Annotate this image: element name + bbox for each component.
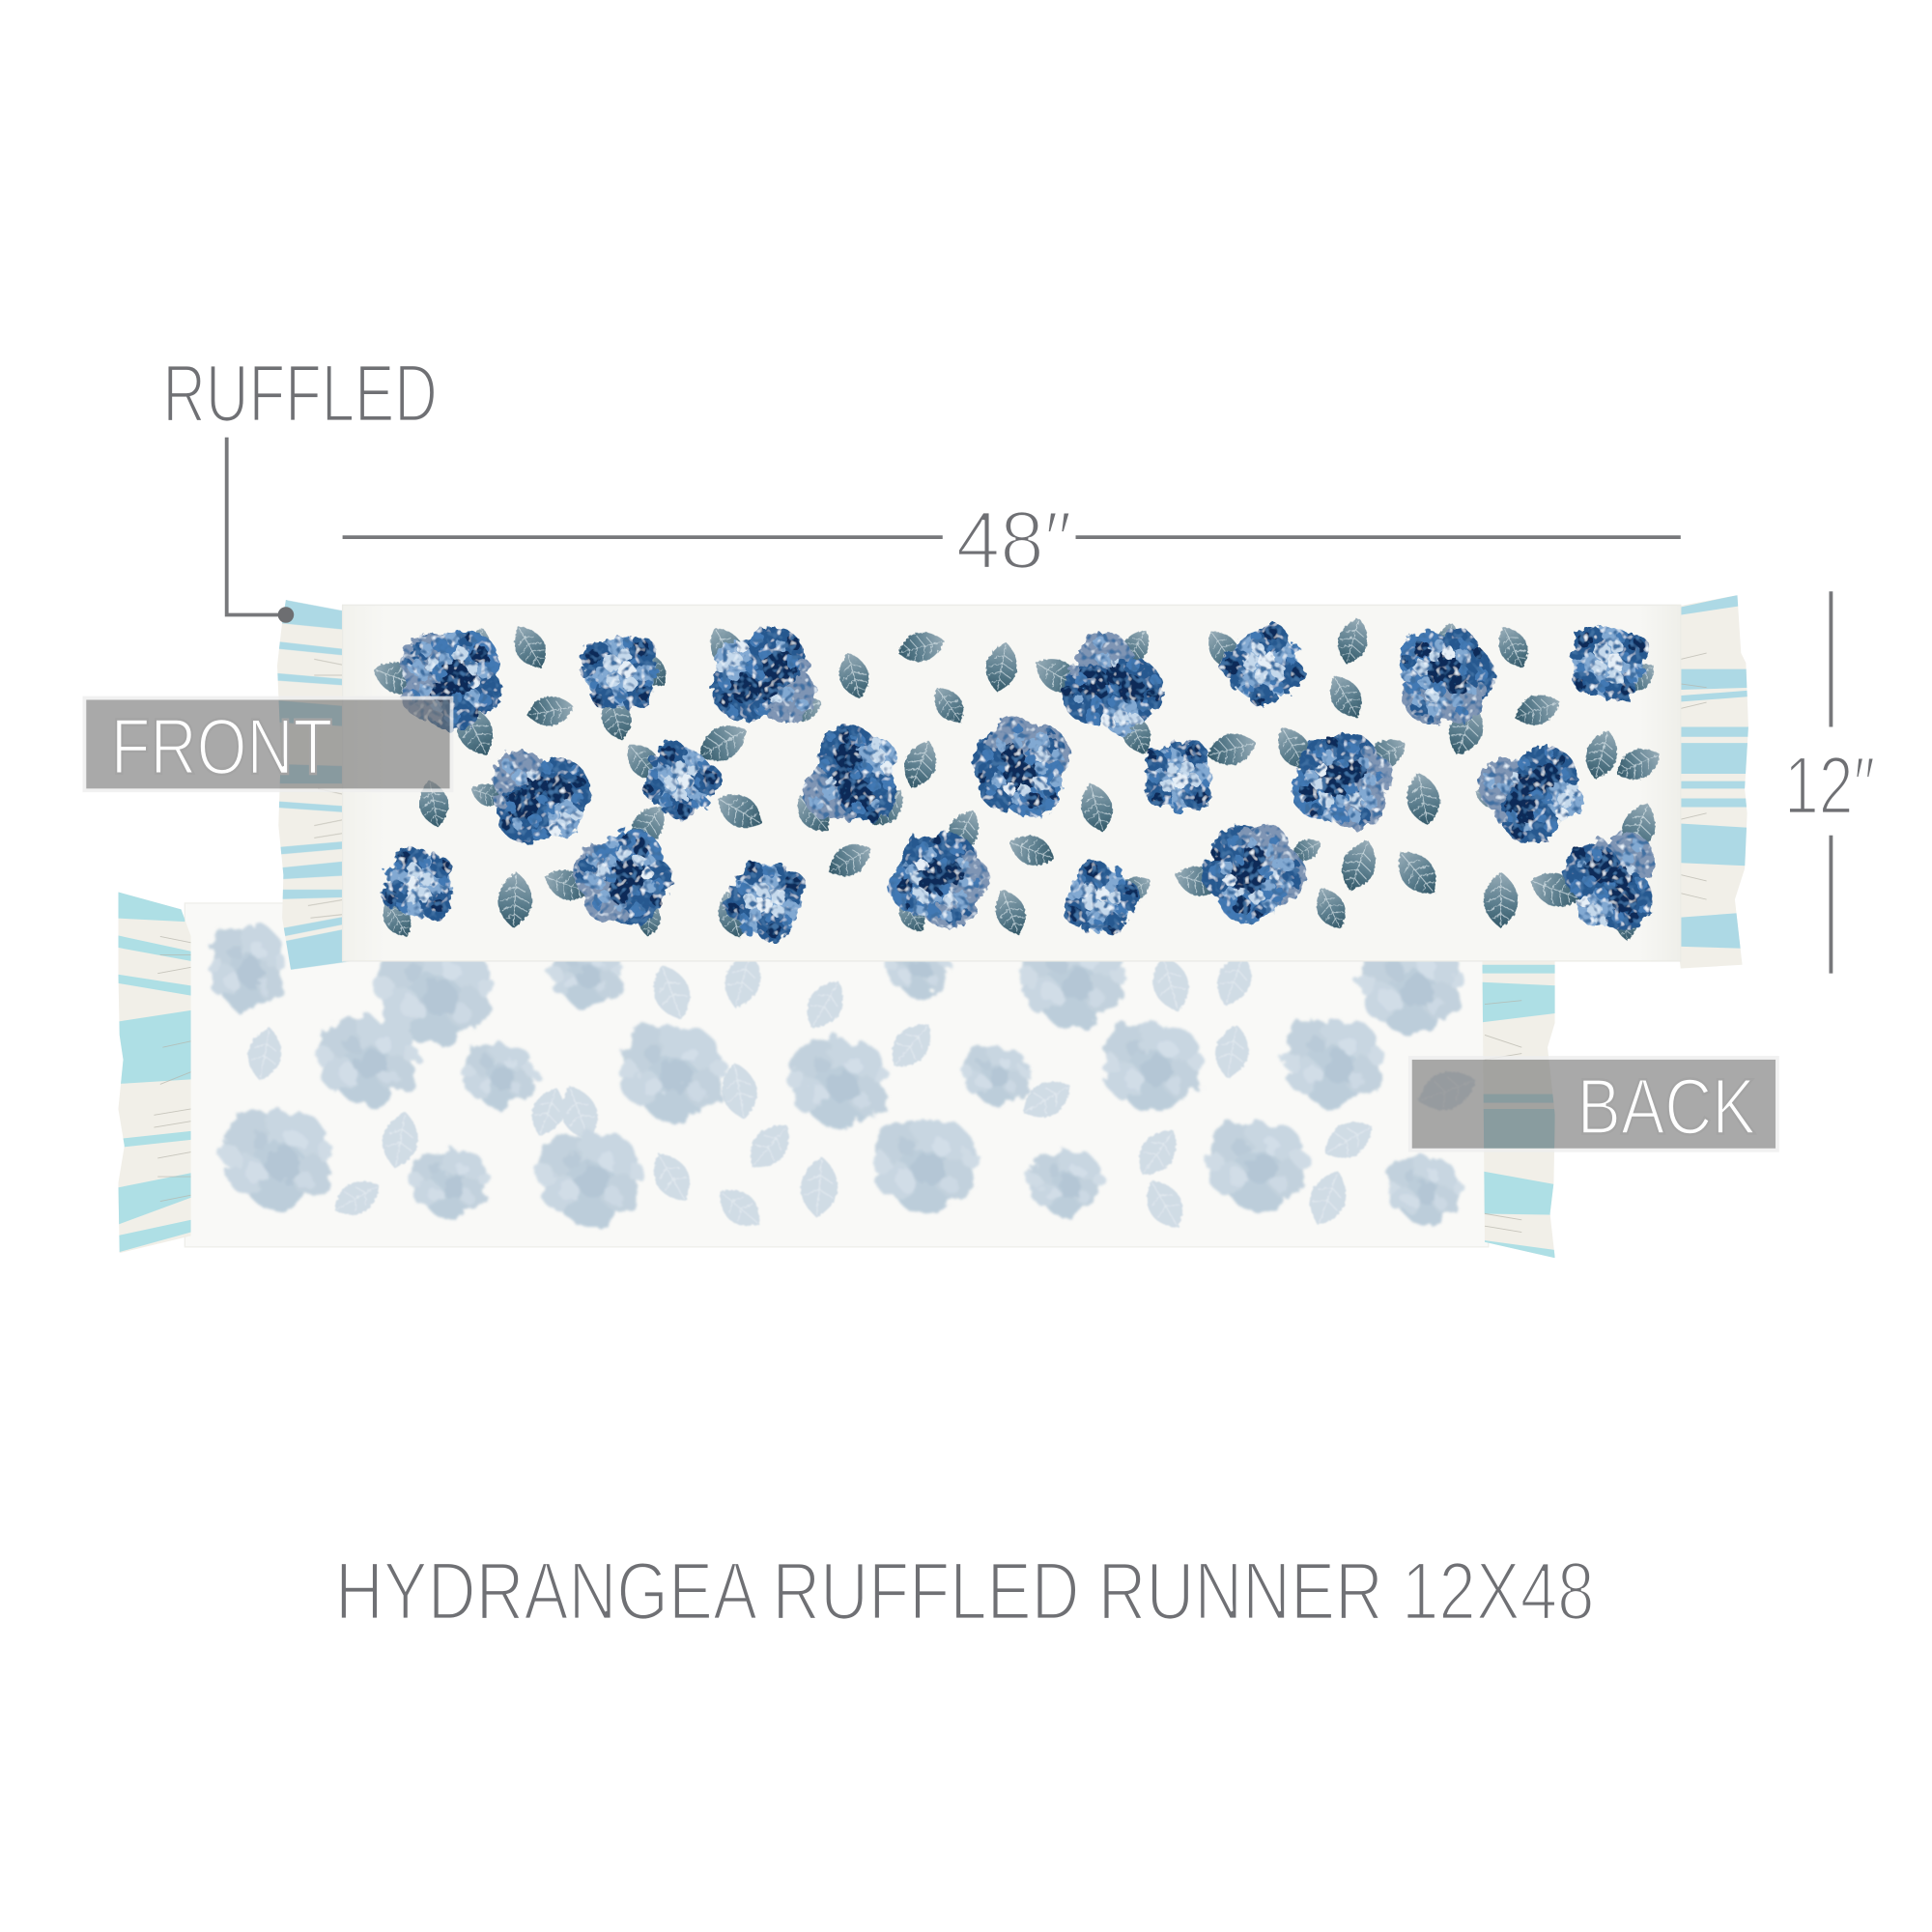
label: front: FRONT xyxy=(111,703,332,791)
panel: front of runner xyxy=(271,591,1754,974)
front runner body xyxy=(343,605,1681,961)
front right ruffle xyxy=(1680,595,1748,968)
back faded blooms print xyxy=(208,923,1466,1226)
back right ruffle xyxy=(1482,962,1555,1258)
dimension: 48 inches: 48″ xyxy=(956,495,1072,585)
front leaves print xyxy=(368,614,1666,943)
back left ruffle xyxy=(118,893,191,1253)
front hydrangea blooms print xyxy=(373,615,1665,952)
title: HYDRANGEA RUFFLED RUNNER 12X48 xyxy=(335,1546,1595,1636)
back runner body xyxy=(185,903,1489,1247)
dimension: 12 inches: 12″ xyxy=(1784,740,1875,831)
label: front xyxy=(84,698,451,791)
label: ruffled: RUFFLED xyxy=(162,348,438,439)
label: back xyxy=(1410,1058,1777,1151)
label: back: BACK xyxy=(1577,1063,1756,1151)
front left ruffle xyxy=(277,600,349,970)
back faded leaves print xyxy=(243,948,1482,1236)
ruffled leader line and dot xyxy=(227,438,294,623)
panel: back of runner xyxy=(111,887,1560,1263)
